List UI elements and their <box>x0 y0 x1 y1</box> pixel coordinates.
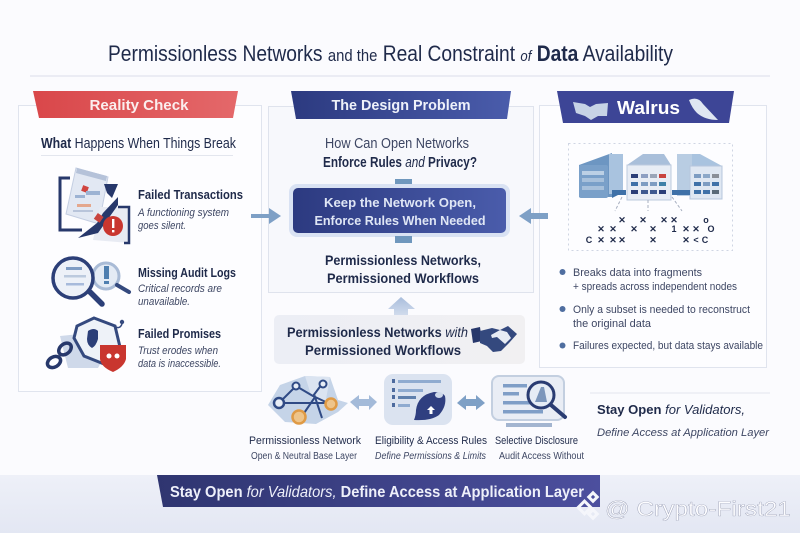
banner: Reality Check: Reality Check <box>90 97 189 114</box>
fragments grid: ✕ <box>630 224 638 234</box>
fragments grid: C <box>702 235 709 245</box>
arrow: double network to rules <box>350 395 377 410</box>
callout: keep the network open: Keep the Network Open, <box>324 195 476 210</box>
icon: shield and broken chain <box>45 318 126 372</box>
text: missing audit logs: unavailable. <box>138 296 190 308</box>
bullet list: Breaks data into fragments <box>573 267 702 279</box>
fragments grid: ✕ <box>649 224 657 234</box>
text: permissionless networks, permissioned workflows: Permissioned Workflows <box>327 270 479 286</box>
label: selective disclosure <box>495 435 584 462</box>
banner: Walrus: Walrus <box>617 98 680 118</box>
callout: permissionless networks with permissioned workflows <box>274 315 525 364</box>
banner: The Design Problem: The Design Problem <box>332 98 470 114</box>
panel: The Design Problem <box>268 91 534 292</box>
banner: Walrus <box>557 91 734 123</box>
bullet list: Only a subset is needed to reconstruct <box>573 304 750 316</box>
arrow: up to design problem <box>388 297 415 322</box>
callout: permissionless networks with permissioned workflows: Permissionless Networks with <box>287 325 468 340</box>
icon: failed transactions document <box>60 168 130 243</box>
text: design question: How Can Open Networks <box>325 136 469 152</box>
fragments grid <box>586 215 715 245</box>
bullet list: + spreads across independent nodes <box>573 281 737 293</box>
fragments grid: ✕ <box>649 235 657 245</box>
fragments grid: ✕ <box>682 224 690 234</box>
arrow: double rules to disclosure <box>457 395 485 410</box>
icon: watermark diamond <box>578 493 597 518</box>
arrow: right panel to center <box>519 208 548 224</box>
text: missing audit logs: Critical records are <box>138 283 222 295</box>
icon: selective disclosure monitor <box>492 376 565 427</box>
panel: Reality Check <box>18 91 262 392</box>
panel: Walrus <box>540 91 766 368</box>
banner: The Design Problem <box>291 91 511 119</box>
connector tab top <box>395 179 412 185</box>
bullet list: Failures expected, but data stays available <box>573 340 763 352</box>
fragments grid: O <box>707 224 715 234</box>
fragments grid: ✕ <box>609 224 617 234</box>
fragments grid: ✕ <box>639 215 647 225</box>
text: missing audit logs <box>138 266 236 308</box>
label: selective disclosure: Audit Access Without <box>499 451 584 462</box>
text: missing audit logs: Missing Audit Logs <box>138 266 236 280</box>
side note: stay open: Define Access at Application Layer <box>597 427 770 439</box>
watermark <box>578 493 791 521</box>
fragments grid: ✕ <box>597 235 605 245</box>
text: permissionless networks, permissioned workflows <box>325 252 481 286</box>
callout: keep the network open: Enforce Rules When Needed <box>314 213 486 228</box>
label: selective disclosure: Selective Disclosure <box>495 435 578 447</box>
banner: Reality Check <box>33 91 238 118</box>
server left <box>579 153 623 198</box>
connector tab bottom <box>395 236 412 243</box>
fragments grid: ✕ <box>670 215 678 225</box>
bottom banner: Stay Open for Validators, Define Access at Application Layer <box>170 484 584 501</box>
text: failed promises: Failed Promises <box>138 327 221 341</box>
label: eligibility and access rules <box>375 435 487 462</box>
text: failed transactions <box>137 188 243 232</box>
callout: permissionless networks with permissioned workflows: Permissioned Workflows <box>305 343 461 358</box>
fragments grid: ✕ <box>609 235 617 245</box>
fragments grid: ✕ <box>692 224 700 234</box>
text: failed promises <box>138 327 221 370</box>
label: permissionless network <box>249 435 361 462</box>
server right <box>677 154 722 199</box>
callout: keep the network open <box>289 184 510 237</box>
fragments grid: ✕ <box>597 224 605 234</box>
label: permissionless network: Open & Neutral Base Layer <box>251 451 358 462</box>
fragments grid: ✕ <box>618 235 626 245</box>
icon: walrus bird <box>689 99 718 120</box>
text: failed transactions: Failed Transactions <box>138 188 243 202</box>
icon: eligibility and access document <box>384 374 452 425</box>
text: design question <box>323 136 477 171</box>
side note: stay open <box>597 402 770 439</box>
fragments grid: C <box>586 235 593 245</box>
text: permissionless networks, permissioned workflows: Permissionless Networks, <box>325 252 481 268</box>
fragments grid: 1 <box>671 224 677 234</box>
text: failed promises: data is inaccessible. <box>138 358 221 370</box>
fragments grid: ✕ <box>682 235 690 245</box>
text: failed transactions: goes silent. <box>138 220 186 232</box>
bullet list: the original data <box>573 318 652 330</box>
title: Permissionless Networks and the Real Constraint of Data Availability <box>108 41 673 66</box>
arrow: left panel to center <box>251 208 281 224</box>
side note: stay open: Stay Open for Validators, <box>597 402 745 417</box>
text: design question: Enforce Rules and Privacy? <box>323 155 477 171</box>
diagram: erasure coded storage <box>568 144 732 250</box>
fragments grid: o <box>703 215 709 225</box>
icon: handshake mark <box>573 102 608 120</box>
fragments grid: ✕ <box>618 215 626 225</box>
bottom banner <box>157 475 600 507</box>
label: eligibility and access rules: Eligibility & Access Rules <box>375 435 487 447</box>
watermark: @ Crypto-First21 <box>605 498 791 521</box>
icon: magnifying glasses <box>53 258 129 304</box>
text: failed promises: Trust erodes when <box>138 345 218 357</box>
bullet list <box>560 267 763 352</box>
fragments grid: < <box>693 235 699 245</box>
icon: permissionless network <box>268 376 348 424</box>
icon: handshake <box>471 326 517 352</box>
fragments grid: ✕ <box>660 215 668 225</box>
server center <box>627 154 671 200</box>
text: failed transactions: A functioning system <box>137 207 229 219</box>
heading: what happens: What Happens When Things Break <box>41 135 236 152</box>
label: eligibility and access rules: Define Permissions & Limits <box>375 451 486 462</box>
label: permissionless network: Permissionless Network <box>249 435 361 447</box>
